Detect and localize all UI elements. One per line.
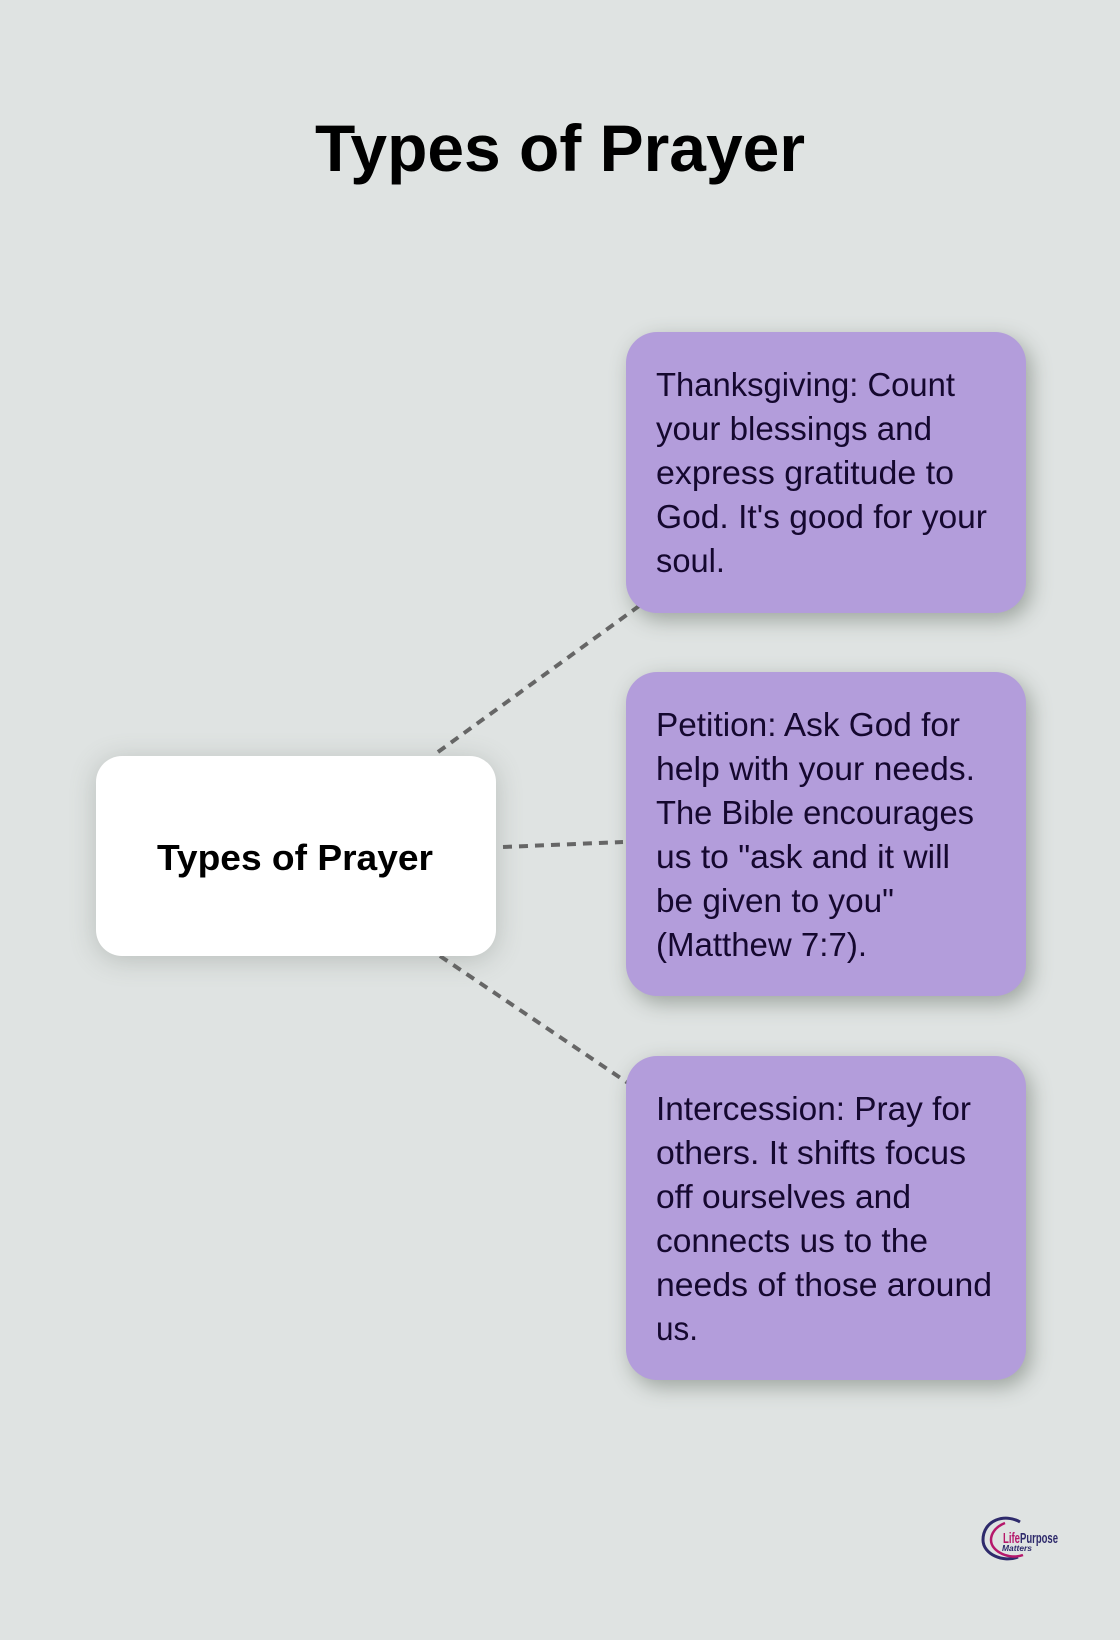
panel: petition: help with your needs. — [656, 750, 975, 787]
panel: intercession — [626, 1056, 1026, 1380]
panel: intercession: needs of those around — [656, 1266, 992, 1303]
panel: thanksgiving — [626, 332, 1026, 613]
panel: intercession: connects us to the — [656, 1222, 928, 1259]
panel: intercession: off ourselves and — [656, 1178, 911, 1215]
panel: thanksgiving: Thanksgiving: Count — [656, 366, 955, 403]
panel: petition: The Bible encourages — [656, 794, 974, 831]
panel: thanksgiving: soul. — [656, 542, 725, 579]
panel: thanksgiving: express gratitude to — [656, 454, 954, 491]
logo: Life Purpose Matters: Life — [1003, 1530, 1020, 1547]
panel: thanksgiving: God. It's good for your — [656, 498, 987, 535]
logo: Life Purpose Matters — [982, 1516, 1058, 1560]
title: Types of Prayer — [315, 111, 805, 185]
panel: thanksgiving: your blessings and — [656, 410, 932, 447]
center node: Types of Prayer — [96, 756, 496, 956]
logo: Life Purpose Matters: Matters — [1002, 1543, 1032, 1553]
panel: petition: (Matthew 7:7). — [656, 926, 867, 963]
panel: petition: Petition: Ask God for — [656, 706, 960, 743]
panel: intercession: Intercession: Pray for — [656, 1090, 971, 1127]
panel: petition: be given to you" — [656, 882, 894, 919]
center node: Types of Prayer: Types of Prayer — [157, 837, 433, 878]
panel: intercession: others. It shifts focus — [656, 1134, 966, 1171]
panel: intercession: us. — [656, 1310, 698, 1347]
panel: petition: us to "ask and it will — [656, 838, 950, 875]
panel: petition — [626, 672, 1026, 996]
